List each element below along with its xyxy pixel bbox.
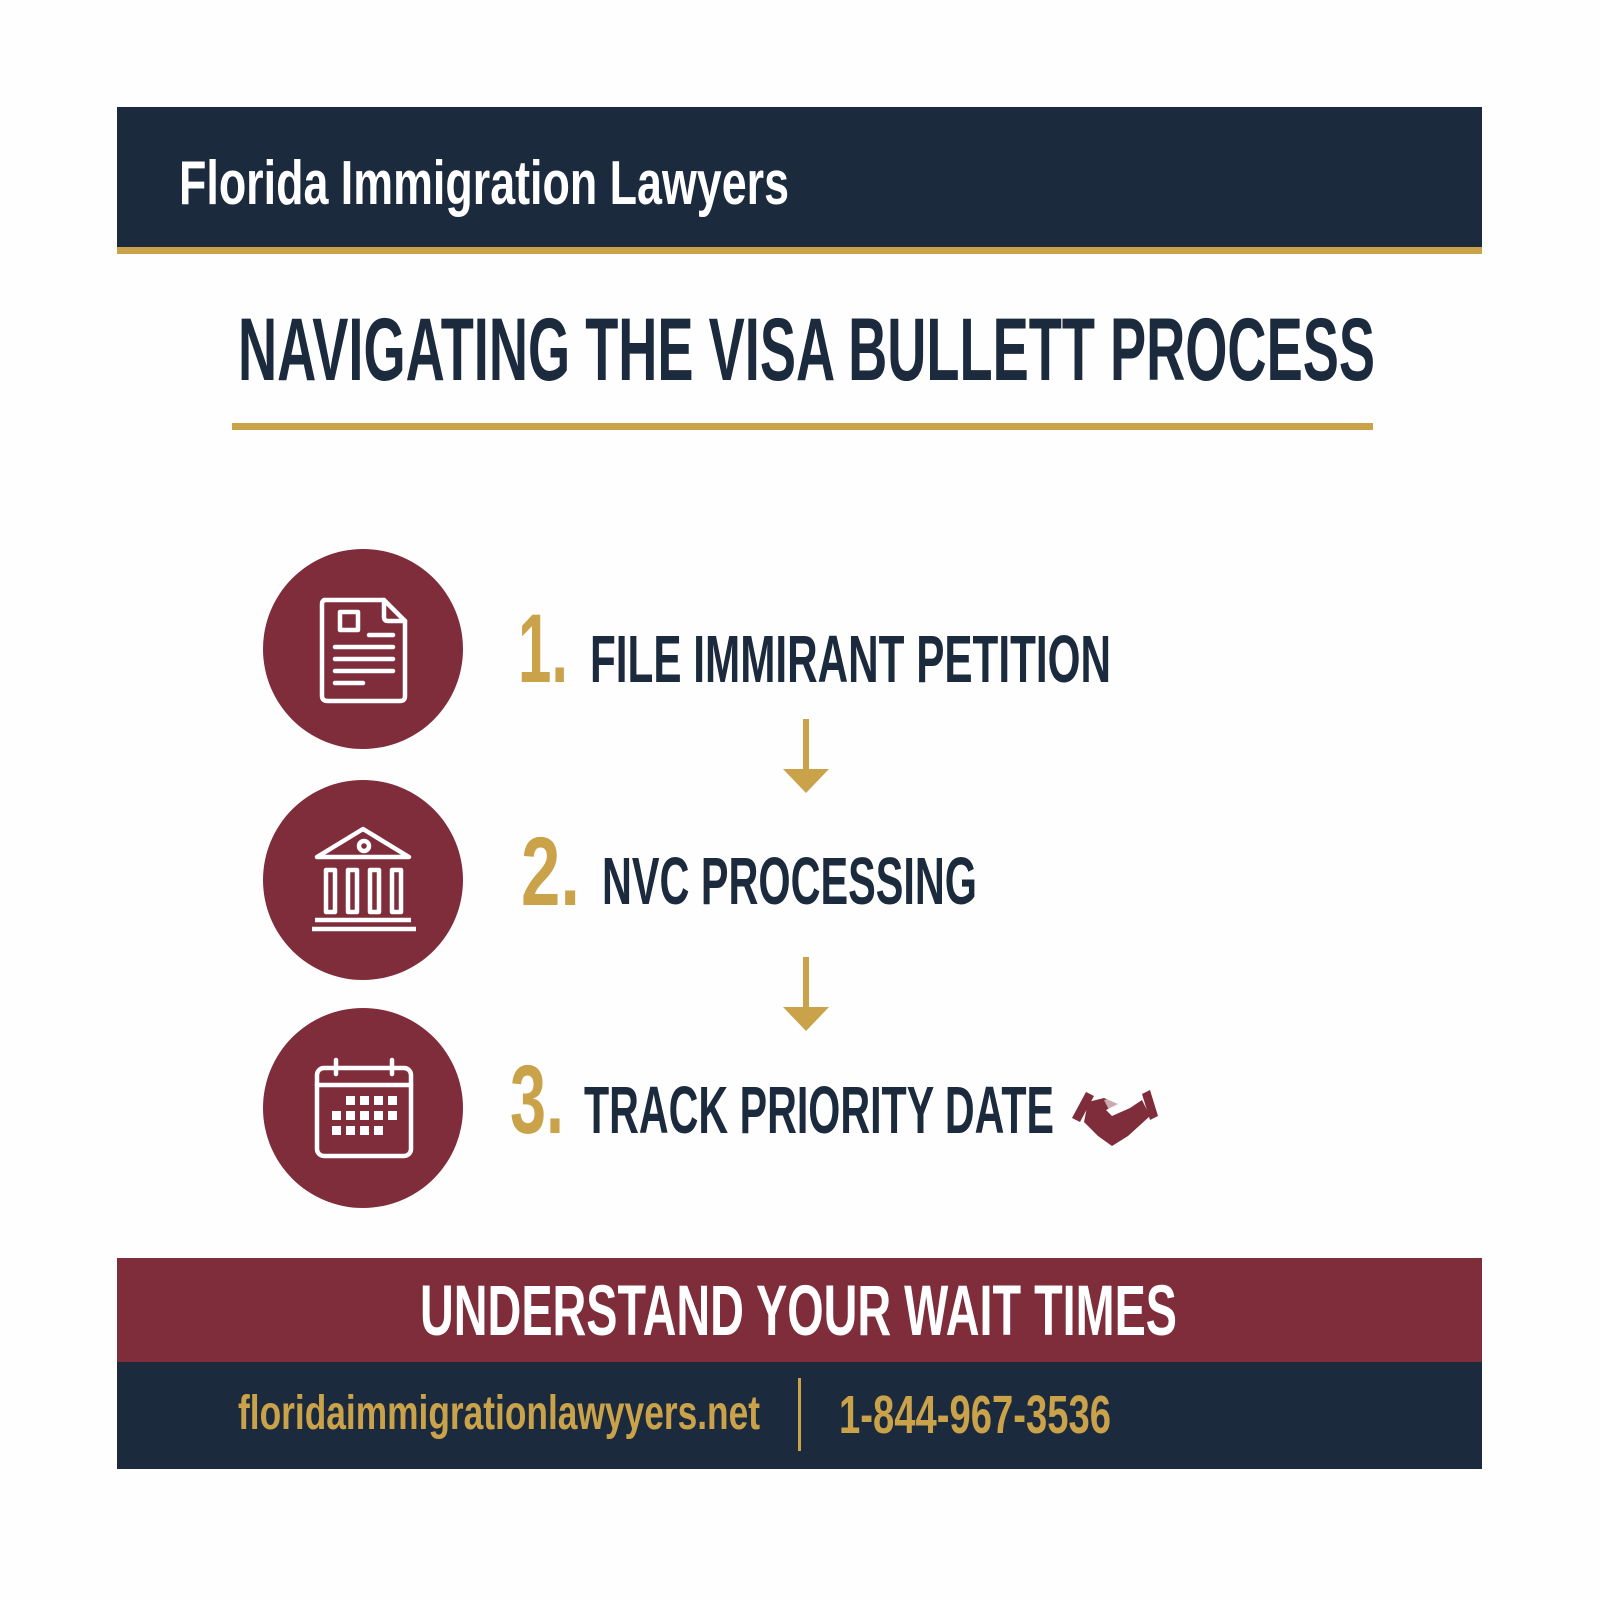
icon: document: [263, 549, 463, 749]
arrow 1: [783, 719, 829, 793]
icon: calendar: [263, 1008, 463, 1208]
step 1: [263, 549, 1111, 749]
phone: 1-844-967-3536: [839, 1385, 1111, 1445]
step number 3: 3.: [510, 1045, 564, 1154]
step 3: [263, 1008, 1158, 1208]
step label 1: FILE IMMIRANT PETITION: [590, 622, 1111, 697]
step label 2: NVC PROCESSING: [602, 844, 977, 919]
step 2: [263, 780, 977, 980]
arrow 2: [783, 957, 829, 1031]
header bar: [117, 107, 1482, 254]
step label 3: TRACK PRIORITY DATE: [584, 1073, 1054, 1148]
step number 2: 2.: [521, 817, 580, 926]
icon: government building: [263, 780, 463, 980]
banner: understand your wait times: [117, 1258, 1482, 1362]
website: floridaimmigrationlawyyers.net: [238, 1387, 760, 1440]
title underline: [232, 423, 1373, 430]
banner: understand your wait times: UNDERSTAND YOUR WAIT TIMES: [420, 1272, 1177, 1351]
header brand text: Florida Immigration Lawyers: [179, 149, 789, 218]
icon: handshake: [1072, 1090, 1158, 1146]
step number 1: 1.: [518, 594, 568, 703]
footer contact bar: [117, 1362, 1482, 1469]
